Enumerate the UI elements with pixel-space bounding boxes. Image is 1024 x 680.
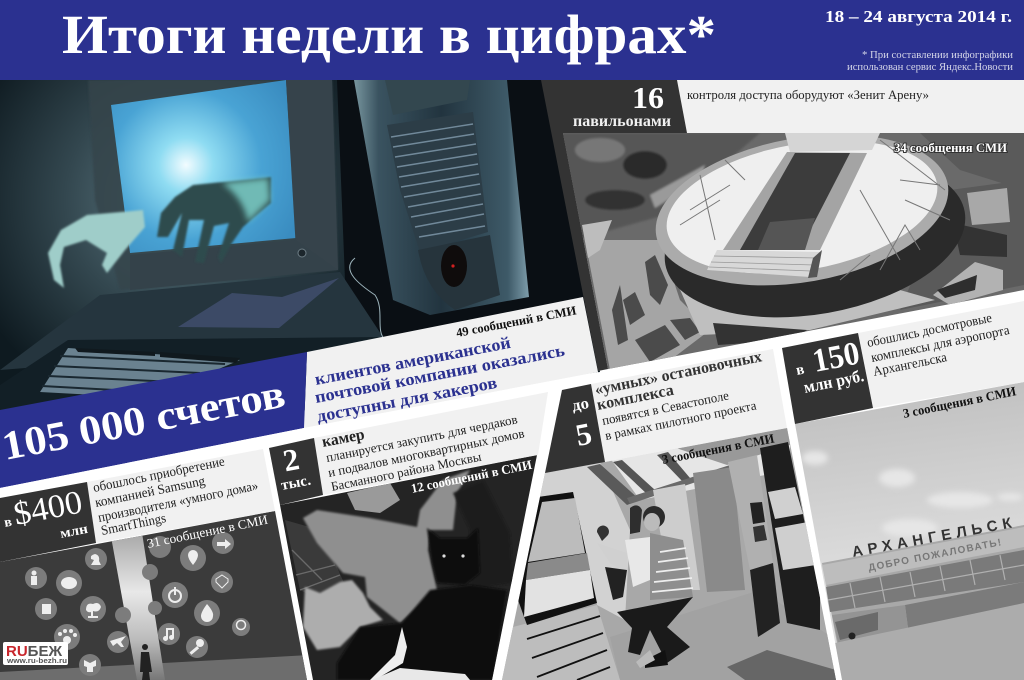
dark tile [545, 384, 605, 473]
blue description: почтовой компании оказались [313, 341, 566, 407]
roof [612, 445, 790, 499]
media count: 34 сообщения СМИ [894, 140, 1007, 155]
footnote: * При составлении инфографики [862, 50, 1013, 61]
label pavilions: павильонами [573, 113, 671, 130]
left plaza [585, 240, 710, 370]
back glass [653, 484, 700, 590]
person [140, 644, 152, 680]
panel: Samsung header [0, 449, 275, 562]
keyboard [26, 337, 380, 394]
photo: hacker hands at computer [0, 80, 600, 410]
blue description: доступны для хакеров [315, 373, 499, 426]
heading: комплекса [595, 382, 675, 414]
information stand [728, 442, 820, 637]
logo: RUBEZH: www.ru-bezh.ru [6, 658, 67, 665]
media count: 49 сообщений в СМИ [455, 303, 578, 340]
panel: smart stops header: до [571, 395, 590, 415]
number 16: 16 [632, 80, 664, 115]
photo: Zenit Arena stadium [563, 133, 1024, 369]
date: 18 – 24 августа 2014 г. [825, 7, 1012, 26]
cat: dark behind [453, 480, 513, 590]
photo: Arkhangelsk airport [790, 380, 1024, 680]
description: планируется закупить для чердаков [325, 411, 519, 465]
description: обошлось приобретение [92, 454, 226, 495]
panel: cameras header: тыс. [280, 473, 312, 494]
airport sign: АРХАНГЕЛЬСК [851, 515, 1014, 561]
cat: black [427, 528, 480, 585]
description: Архангельска [872, 349, 948, 379]
description [92, 454, 259, 538]
photo: smart home icons [0, 500, 320, 680]
photo: smart bus stop [500, 425, 840, 680]
kiosk [500, 492, 620, 680]
logo: RUBEZH: RUБЕЖ [6, 643, 62, 660]
panel: airport header: в [795, 362, 806, 379]
description: SmartThings [100, 510, 167, 538]
hand: pale [48, 210, 145, 288]
panel: smart stops header: 5 [573, 416, 595, 453]
panel: 16 pavilions header [541, 80, 1024, 371]
photo: cats [280, 455, 537, 680]
building [822, 525, 1024, 643]
description: Басманного района Москвы [330, 449, 483, 494]
blue banner [0, 352, 307, 488]
blue description [313, 333, 566, 426]
panel: cameras header [269, 392, 548, 505]
media count: 12 сообщений в СМИ [410, 457, 533, 496]
heading: камер [321, 426, 366, 451]
cat: black and white [337, 585, 507, 680]
footnote: использован сервис Яндекс.Новости [847, 62, 1013, 73]
dark tile [269, 438, 323, 505]
big number: 105 000 счетов [0, 370, 289, 469]
blue description: клиентов американской [313, 333, 512, 389]
description: появятся в Севастополе [601, 387, 730, 428]
heading: «умных» остановочных [593, 348, 763, 399]
stadium body [664, 184, 966, 318]
dark tile [0, 482, 96, 562]
description [866, 310, 1011, 379]
description: производителя «умного дома» [97, 478, 259, 525]
amount: $400 [11, 485, 85, 533]
panel: smart stops header [545, 348, 787, 473]
floor [827, 634, 836, 679]
footnote [847, 50, 1013, 73]
right buildings [900, 180, 1024, 310]
logo: RUBEZH [3, 642, 68, 665]
dark tile and side band [541, 80, 687, 371]
tower case [354, 80, 529, 315]
panel: airport header [782, 301, 1024, 424]
bench [727, 650, 836, 680]
media count: 3 сообщения в СМИ [661, 430, 775, 467]
panel: airport header: млн руб. [802, 366, 866, 397]
front plaza [680, 289, 935, 335]
icon glyphs [31, 539, 246, 672]
cat: light [303, 580, 383, 650]
roof [656, 138, 948, 286]
cat: grey [303, 470, 470, 623]
description: комплексы для аэропорта [870, 322, 1011, 365]
description: компанией Samsung [94, 473, 207, 510]
description: контроля доступа оборудуют «Зенит Арену» [687, 88, 929, 102]
hand: dark [157, 177, 271, 263]
dark tile [782, 333, 873, 424]
media count: 3 сообщения в СМИ [902, 383, 1017, 421]
panel: Samsung header: млн [59, 522, 89, 542]
description: в рамках пилотного проекта [604, 397, 758, 443]
description: обошлись досмотровые [866, 310, 993, 350]
south stand [707, 250, 820, 277]
icons: smart home circles [25, 532, 250, 676]
roof masts [680, 140, 950, 280]
panel: hacked accounts [0, 297, 600, 498]
truss [713, 323, 807, 345]
media count: 31 сообщение в СМИ [146, 512, 269, 551]
description: и подвалов многоквартирных домов [327, 425, 526, 480]
photo: Arkhangelsk airport: ДОБРО ПОЖАЛОВАТЬ! [867, 537, 1002, 574]
panel: Samsung header: в [3, 515, 14, 531]
header band [0, 0, 1024, 80]
people [597, 505, 693, 668]
panel: airport header: 150 [810, 336, 863, 380]
title: Итоги недели в цифрах* [62, 4, 716, 65]
description [325, 411, 526, 494]
panel: cameras header: 2 [280, 441, 302, 478]
trees [560, 133, 760, 240]
